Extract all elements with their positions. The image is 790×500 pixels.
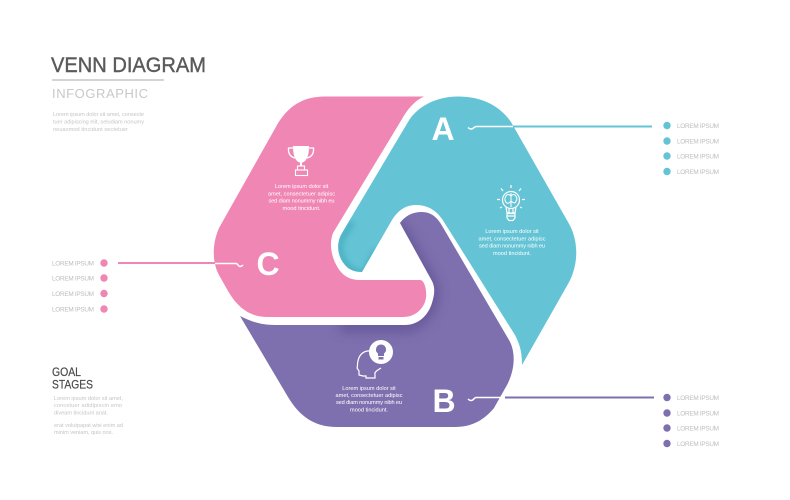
text: segment C: amet, consectetuer adipisc <box>268 192 335 198</box>
list C <box>52 259 108 314</box>
list A: LOREM IPSUM <box>677 154 719 160</box>
body text: erat volutpapat wisi enim ad <box>54 423 123 429</box>
list A: LOREM IPSUM <box>677 169 719 176</box>
body text <box>54 396 123 436</box>
heading <box>52 365 93 392</box>
text: segment A: amet, consectetuer adipisc <box>478 236 546 242</box>
text: segment B: mood tincidunt. <box>350 408 388 414</box>
body text: Lorem ipsum dolor sit amet, <box>54 396 123 402</box>
segment C: pink <box>214 96 426 317</box>
text: segment B <box>336 386 403 414</box>
connector A <box>468 126 652 129</box>
heading: STAGES <box>52 378 93 392</box>
list C: LOREM IPSUM <box>52 260 94 268</box>
list A: LOREM IPSUM <box>677 123 719 130</box>
icon: head with idea bubble <box>357 340 393 378</box>
list B: LOREM IPSUM <box>677 441 719 448</box>
list C: LOREM IPSUM <box>52 291 94 298</box>
body text: diveam tincidunt anat. <box>54 410 108 416</box>
text: segment C: Lorem ipsum dolor sit <box>275 184 329 190</box>
body text: concetuer adidipiscin emo <box>54 403 122 409</box>
list B: LOREM IPSUM <box>677 410 719 418</box>
text: segment C: sed diam nonummy nibh eu <box>268 198 334 204</box>
letter B: B <box>432 383 456 419</box>
list B: LOREM IPSUM <box>677 426 719 432</box>
list B: LOREM IPSUM <box>677 395 719 402</box>
text: segment C: mood tincidunt. <box>283 206 321 212</box>
list A: LOREM IPSUM <box>677 138 719 146</box>
letter C: C <box>256 246 280 282</box>
intro text <box>53 112 144 133</box>
text: segment A <box>478 229 546 257</box>
connector C <box>118 263 243 266</box>
title: VENN DIAGRAM <box>51 54 206 77</box>
intro text: tuer adipiscing elit, seludiam nonumy <box>53 120 144 126</box>
segment A: teal <box>338 96 576 365</box>
list C: LOREM IPSUM <box>52 306 94 314</box>
text: segment B: sed diam nonummy nibh eu <box>336 400 402 406</box>
text: segment A: sed diam nonummy nibh eu <box>479 244 545 250</box>
text: segment A: mood tincidunt. <box>493 251 531 257</box>
intro text: Lorem ipsum dolor sit amet, consecte <box>53 112 144 118</box>
title block <box>51 54 206 133</box>
icon: light bulb with brain <box>497 185 525 220</box>
infographic canvas <box>50 57 718 448</box>
list A <box>663 122 719 176</box>
subtitle: INFOGRAPHIC <box>52 86 148 101</box>
body text: minim veniam, quis nos. <box>54 430 113 436</box>
list B <box>663 394 719 448</box>
text: segment B: Lorem ipsum dolor sit <box>342 386 396 392</box>
segment B: purple <box>240 212 514 427</box>
text: segment A: Lorem ipsum dolor sit <box>485 229 539 235</box>
connector B <box>468 398 654 400</box>
heading: GOAL <box>52 365 81 379</box>
letter A: A <box>431 111 455 147</box>
intro text: neuasmod tincidunt sectetuer <box>53 127 128 133</box>
text: segment C <box>268 184 335 212</box>
icon: trophy <box>288 146 314 176</box>
text: segment B: amet, consectetuer adipisc <box>336 393 403 399</box>
list C: LOREM IPSUM <box>52 276 94 282</box>
goal stages block <box>52 365 123 436</box>
